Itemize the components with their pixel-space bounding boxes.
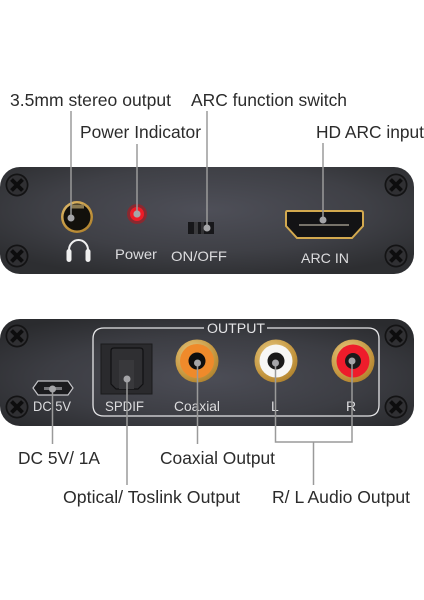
text: L: L xyxy=(271,398,279,414)
icon: bottom left screw xyxy=(6,396,28,418)
leader: 3.5mm stereo output xyxy=(68,111,74,222)
label: DC 5V/ 1A: DC 5V/ 1A xyxy=(18,448,100,468)
leader: coaxial output xyxy=(194,360,201,444)
leader: R/L audio output xyxy=(272,358,356,485)
icon: right RCA jack xyxy=(332,340,374,382)
icon: power LED xyxy=(127,204,147,224)
label: HD ARC input: HD ARC input xyxy=(316,122,424,142)
leader: DC 5V xyxy=(49,386,56,444)
text: ARC IN: ARC IN xyxy=(301,250,349,266)
icon: top left screw xyxy=(6,324,28,348)
text: ON/OFF: ON/OFF xyxy=(171,248,227,264)
icon: top right screw xyxy=(384,324,408,348)
icon: 3.5mm jack xyxy=(61,201,93,233)
label: Coaxial Output: Coaxial Output xyxy=(160,448,275,468)
icon: headphones xyxy=(66,240,90,262)
text: Power: Power xyxy=(115,246,157,262)
text: SPDIF: SPDIF xyxy=(105,398,144,414)
panel: top device face xyxy=(0,167,414,274)
leader: optical output xyxy=(124,376,130,485)
label: Power Indicator: Power Indicator xyxy=(80,122,201,142)
icon: bottom right screw xyxy=(384,244,408,268)
text: R: R xyxy=(346,398,356,414)
text: OUTPUT: OUTPUT xyxy=(207,321,265,336)
icon: bottom right screw xyxy=(384,396,408,418)
icon: top left screw xyxy=(6,174,28,196)
label: 3.5mm stereo output: 3.5mm stereo output xyxy=(10,90,171,110)
label: Optical/ Toslink Output: Optical/ Toslink Output xyxy=(63,487,240,507)
leader: power indicator xyxy=(134,144,140,218)
text: Coaxial: Coaxial xyxy=(174,398,220,414)
text: DC 5V: DC 5V xyxy=(33,398,72,414)
icon: micro USB port xyxy=(33,381,73,395)
output frame xyxy=(93,328,379,416)
leader: ARC switch xyxy=(204,111,210,232)
icon: bottom left screw xyxy=(6,244,28,268)
icon: coaxial jack xyxy=(176,340,218,382)
icon: left RCA jack xyxy=(254,340,298,382)
panel: bottom device face xyxy=(0,319,414,426)
label: R/ L Audio Output: R/ L Audio Output xyxy=(272,487,410,507)
icon: top right screw xyxy=(384,174,408,196)
label: ARC function switch: ARC function switch xyxy=(191,90,347,110)
icon: optical port xyxy=(101,344,152,394)
leader: HD ARC input xyxy=(320,143,326,224)
icon: ON/OFF switch xyxy=(188,222,214,234)
icon: HDMI port xyxy=(286,211,363,238)
